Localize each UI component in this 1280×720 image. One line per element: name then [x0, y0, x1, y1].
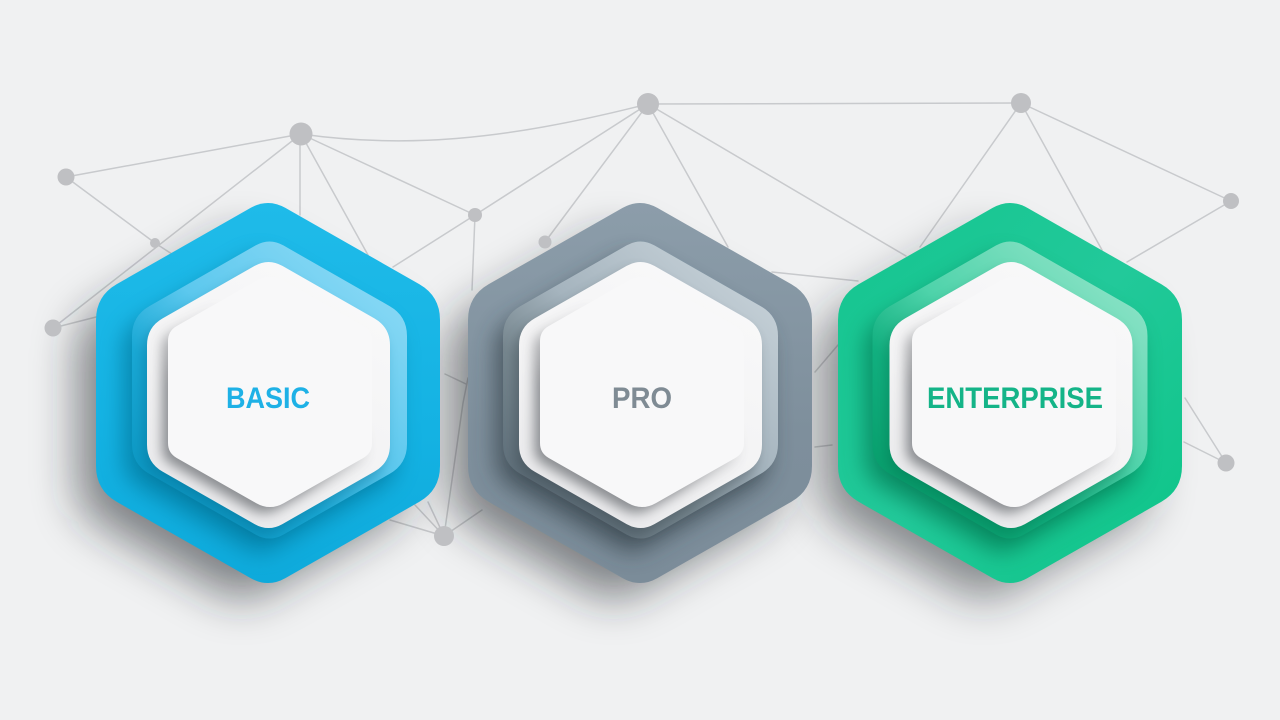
- drop shadows beneath the hexagons: [79, 237, 1147, 599]
- network nodes: [44, 93, 1239, 546]
- label: basic: BASIC: [226, 382, 310, 415]
- label: enterprise: ENTERPRISE: [927, 382, 1103, 415]
- panel: pro hexagon: [468, 203, 812, 583]
- network of connecting lines: [53, 103, 1231, 536]
- label: pro: PRO: [612, 382, 672, 415]
- panel: basic hexagon: [96, 203, 440, 583]
- panel: enterprise hexagon: [838, 203, 1182, 583]
